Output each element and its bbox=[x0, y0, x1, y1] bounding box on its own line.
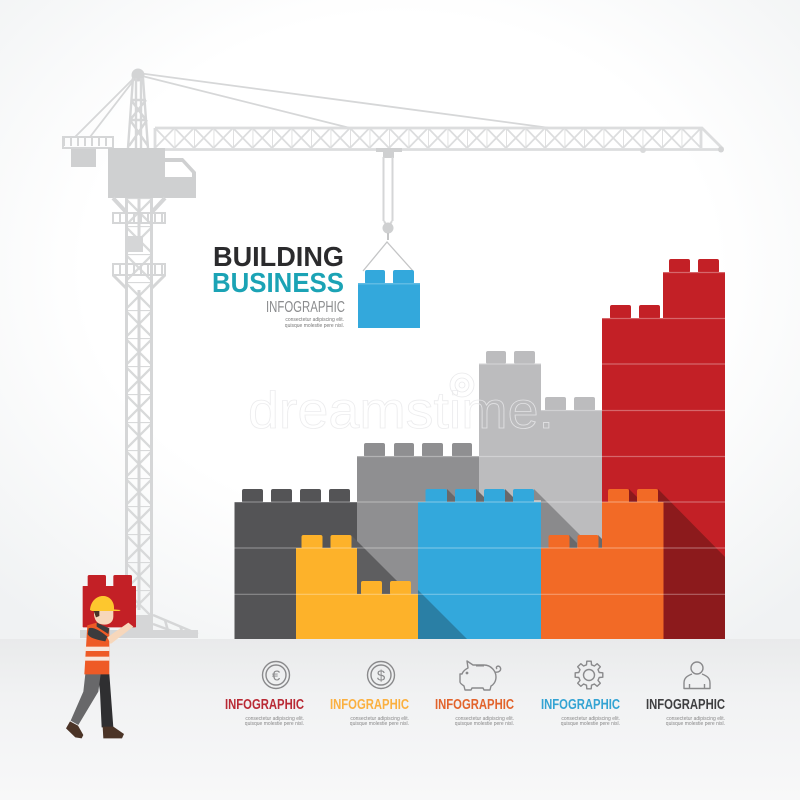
tower crane bbox=[63, 68, 724, 638]
hook pulley ropes bbox=[384, 157, 392, 228]
red blocks bbox=[602, 259, 725, 639]
title body text: consectetur adipiscing elit. bbox=[285, 317, 344, 323]
column 3 body: consectetur adipiscing elit. bbox=[455, 716, 514, 722]
light grey shadow bbox=[534, 489, 602, 600]
crane base bbox=[80, 615, 198, 638]
worker head bbox=[90, 596, 121, 625]
column 3 body bbox=[455, 716, 514, 727]
yellow block shadow on grey bbox=[350, 535, 418, 639]
worker arm bbox=[88, 623, 133, 644]
icon row bbox=[225, 661, 725, 727]
column 1 body: quisque molestie pere nisl. bbox=[245, 721, 304, 727]
icon: dollar coin: $ bbox=[377, 668, 386, 684]
stud shadows on grey bbox=[447, 489, 602, 548]
worker shoes bbox=[66, 721, 124, 738]
column 4 body: quisque molestie pere nisl. bbox=[561, 721, 620, 727]
icon: gear bbox=[575, 661, 603, 689]
column 2: dollar bbox=[330, 662, 409, 727]
column 5 body bbox=[666, 716, 725, 727]
column 3: piggy bank bbox=[435, 661, 514, 727]
hanging blue block bbox=[358, 270, 420, 328]
worker vest bbox=[84, 623, 109, 674]
crane jib bbox=[108, 128, 724, 153]
upper platform bbox=[113, 213, 165, 223]
column 4 body bbox=[561, 716, 620, 727]
title body text bbox=[285, 317, 344, 329]
column 4: gear bbox=[541, 661, 620, 727]
blue block bbox=[418, 489, 541, 639]
column 5 body: quisque molestie pere nisl. bbox=[666, 721, 725, 727]
column 1: euro bbox=[225, 662, 304, 727]
column 4 heading: INFOGRAPHIC bbox=[541, 697, 620, 713]
yellow block bbox=[296, 535, 418, 639]
blue shadow bbox=[418, 590, 467, 639]
column 5 heading: INFOGRAPHIC bbox=[646, 697, 725, 713]
column 5 body: consectetur adipiscing elit. bbox=[666, 716, 725, 722]
crane mast bbox=[113, 198, 165, 618]
column 5: person bbox=[646, 662, 725, 727]
red shadow bbox=[658, 489, 725, 639]
column 2 body: quisque molestie pere nisl. bbox=[350, 721, 409, 727]
icon: person bbox=[684, 662, 710, 688]
icon: piggy bank bbox=[460, 661, 501, 690]
worker carrying block bbox=[66, 575, 136, 738]
hook block bbox=[382, 222, 394, 240]
lower platform bbox=[113, 264, 165, 288]
title block bbox=[212, 241, 345, 329]
column 2 heading: INFOGRAPHIC bbox=[330, 697, 409, 713]
carried red block bbox=[83, 575, 136, 627]
background bbox=[0, 0, 800, 639]
dark grey block bbox=[234, 489, 357, 639]
crane cab bbox=[108, 148, 196, 198]
block chart bbox=[234, 259, 725, 639]
watermark: dreamstime. bbox=[248, 382, 554, 440]
column 1 heading: INFOGRAPHIC bbox=[225, 697, 304, 713]
crane cables bbox=[75, 73, 550, 137]
subheading: INFOGRAPHIC bbox=[266, 299, 345, 316]
counter jib bbox=[63, 137, 113, 148]
crane apex bbox=[128, 68, 148, 148]
column 4 body: consectetur adipiscing elit. bbox=[561, 716, 620, 722]
heading: building: BUILDING bbox=[213, 241, 344, 272]
orange stud shadow bbox=[629, 489, 637, 502]
column 2 body bbox=[350, 716, 409, 727]
medium grey blocks bbox=[357, 443, 479, 639]
column 1 body: consectetur adipiscing elit. bbox=[245, 716, 304, 722]
light grey blocks bbox=[479, 351, 602, 560]
trolley bbox=[376, 148, 402, 158]
column 1 body bbox=[245, 716, 304, 727]
column 2 body: consectetur adipiscing elit. bbox=[350, 716, 409, 722]
icon: euro coin: € bbox=[272, 668, 281, 684]
column 3 body: quisque molestie pere nisl. bbox=[455, 721, 514, 727]
column 3 heading: INFOGRAPHIC bbox=[435, 697, 514, 713]
floor bbox=[0, 639, 800, 800]
sling bbox=[363, 242, 413, 271]
title body text: quisque molestie pere nisl. bbox=[285, 323, 344, 329]
worker legs bbox=[71, 674, 113, 727]
orange block bbox=[541, 489, 664, 639]
counterweight bbox=[71, 149, 96, 167]
heading: business: BUSINESS bbox=[212, 267, 344, 298]
